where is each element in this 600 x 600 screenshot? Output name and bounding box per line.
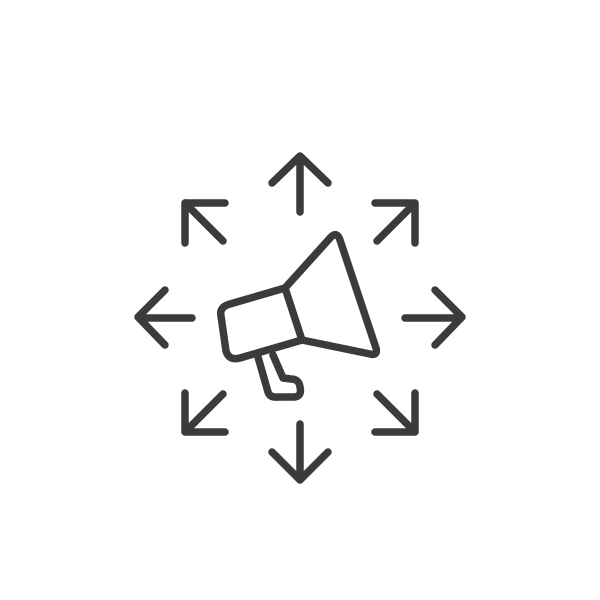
arrow: top-left (185, 203, 225, 243)
arrow: top-right (375, 203, 415, 243)
arrow: bottom-left (185, 393, 225, 432)
megaphone (221, 235, 376, 397)
arrow: bottom-right (375, 393, 415, 432)
arrow: left (138, 290, 192, 345)
arrow: up (272, 156, 328, 212)
arrow: down (272, 424, 328, 480)
arrow: right (405, 290, 462, 345)
